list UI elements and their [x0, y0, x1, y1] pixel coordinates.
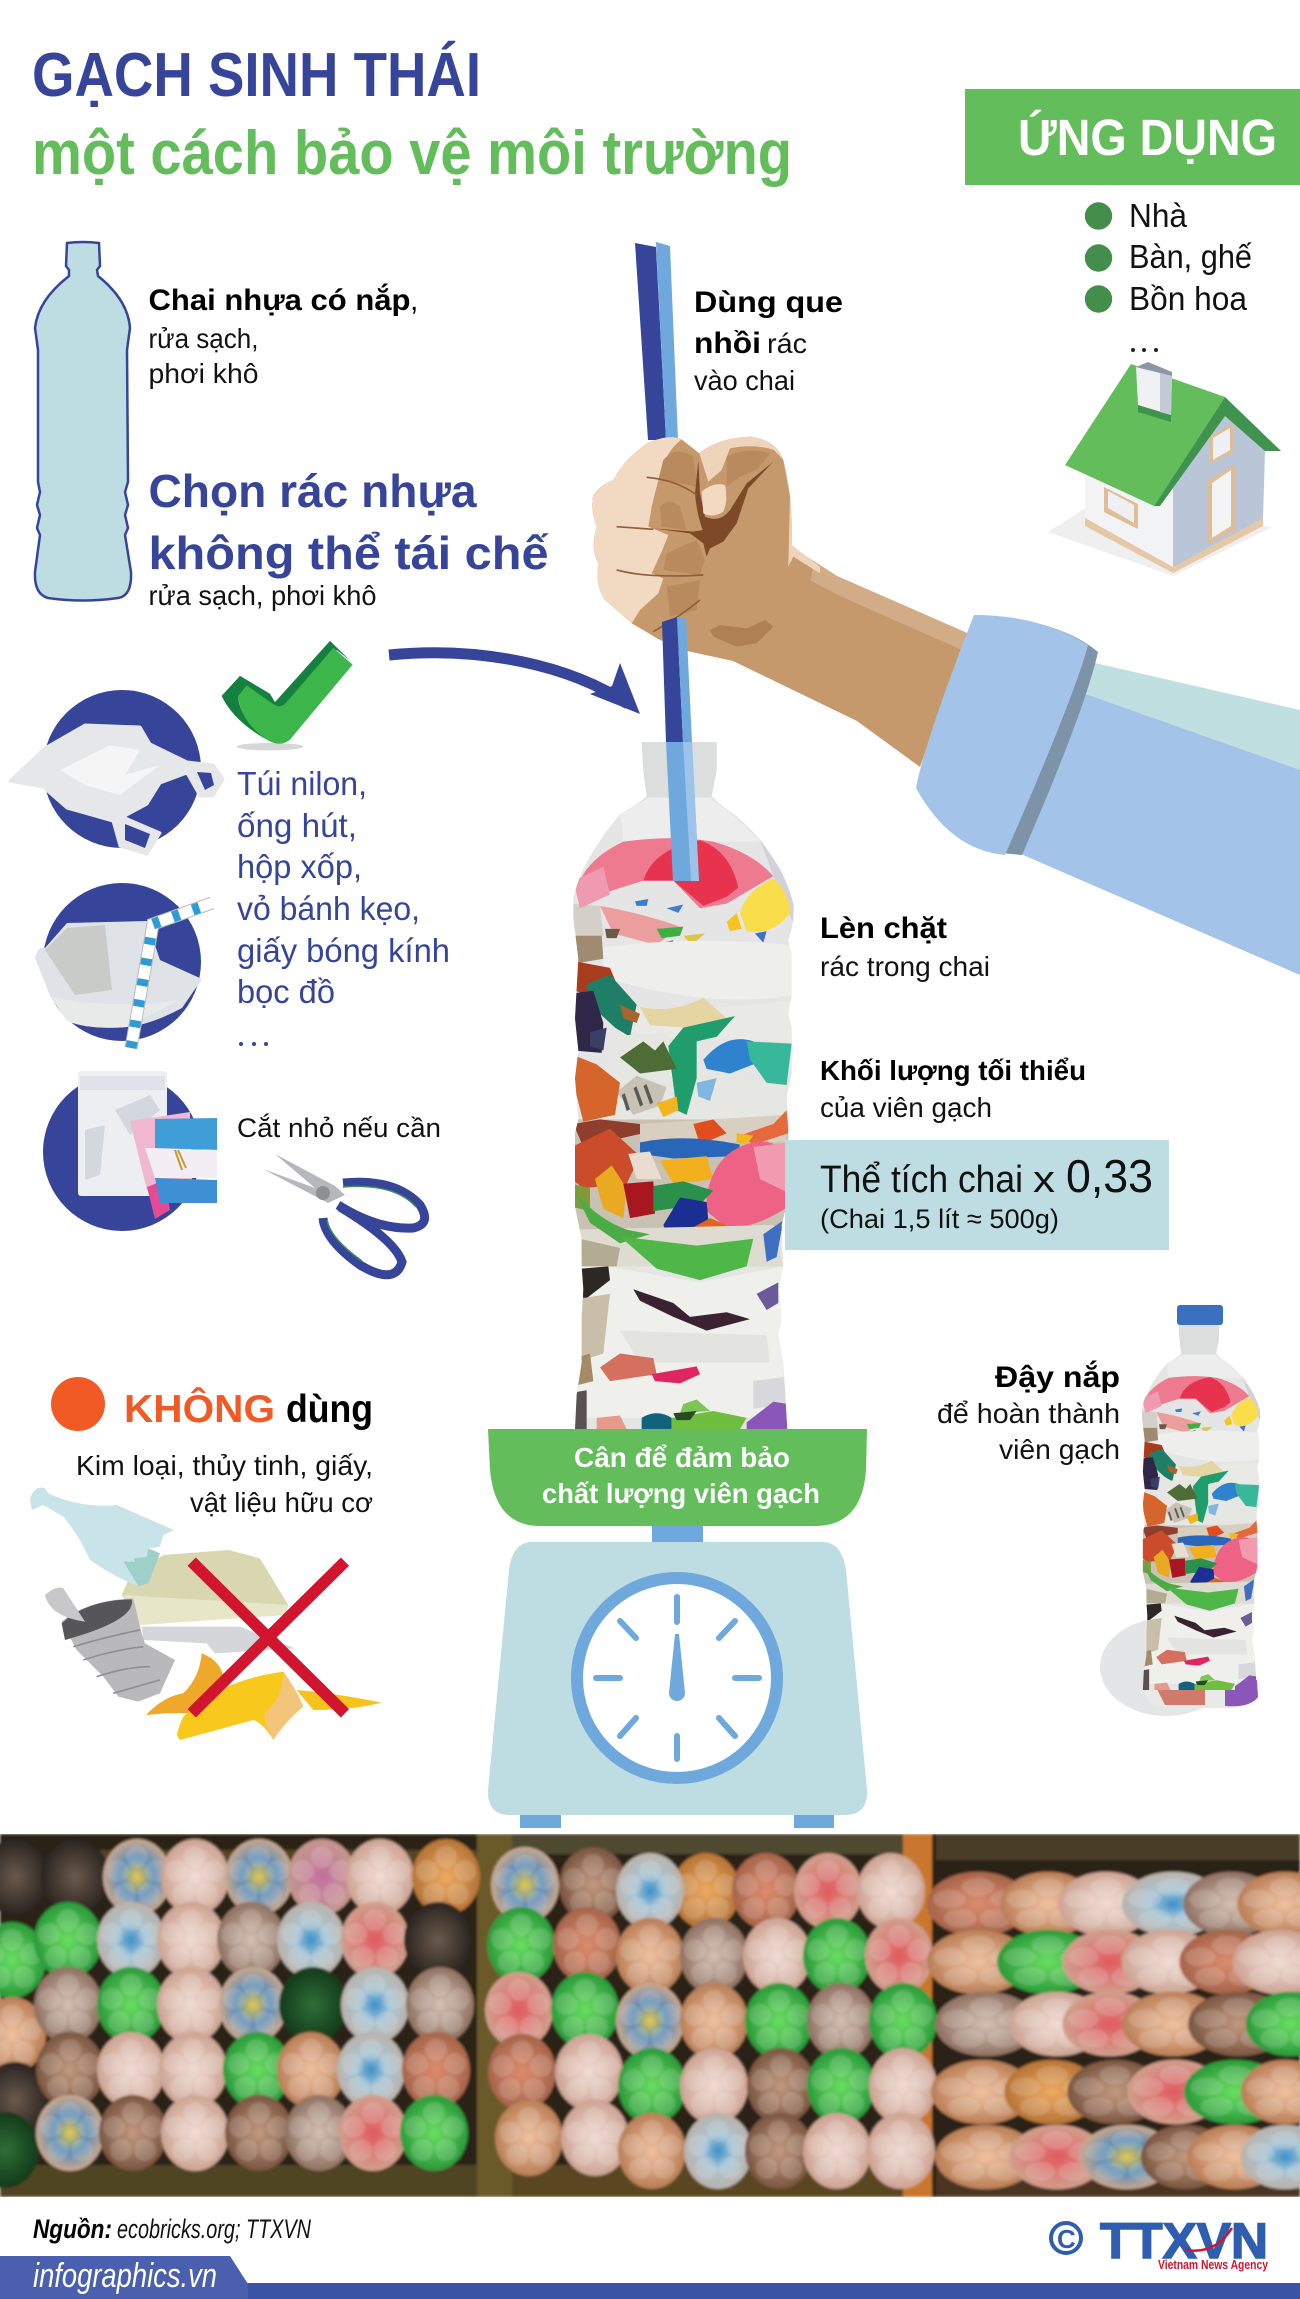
callout: weight formula: Thể tích chai	[820, 1159, 1023, 1201]
heading: do not use: dùng	[286, 1388, 373, 1431]
text: close cap: Đậy nắp	[995, 1360, 1120, 1394]
main filled bottle	[570, 742, 797, 1429]
heading: do not use: KHÔNG	[124, 1386, 275, 1431]
icon: orange dot	[51, 1377, 105, 1431]
text: bottle instruction: ,	[410, 284, 418, 317]
text: minimum weight	[820, 1055, 1086, 1123]
stick inside bottle	[666, 742, 699, 881]
lower stick	[662, 617, 692, 742]
applications list	[1085, 197, 1252, 352]
text: use stick: nhồi	[694, 327, 761, 360]
icon: plastic bag on blue circle	[10, 690, 223, 854]
icon: empty plastic bottle	[35, 242, 131, 600]
fist	[592, 437, 820, 660]
title: GẠCH SINH THÁI	[32, 41, 481, 110]
dial	[577, 1578, 777, 1778]
text: use stick: vào chai	[694, 365, 795, 396]
text: pack tightly: Lèn chặt	[820, 912, 947, 945]
text: recyclable plastic list: vỏ bánh kẹo,	[237, 890, 420, 927]
text: bottle instruction	[148, 283, 418, 389]
applications list: Nhà	[1129, 197, 1188, 234]
text: source: Nguồn:	[33, 2214, 112, 2244]
text: pack tightly: rác trong chai	[820, 951, 990, 982]
text: bottle instruction: phơi khô	[148, 358, 258, 389]
sleeve	[687, 548, 1300, 975]
callout: weight formula: 0,33	[1066, 1150, 1153, 1202]
title	[32, 41, 792, 188]
logo: TTXVN: TTXVN	[1100, 2213, 1268, 2269]
heading: choose non-recyclable plastic: rửa sạch, phơi khô	[148, 580, 376, 611]
text: close cap: để hoàn thành	[937, 1398, 1120, 1429]
callout: weight formula: (Chai 1,5 lít ≈ 500g)	[820, 1204, 1059, 1234]
text: forbidden materials: Kim loại, thủy tinh, giấy,	[76, 1450, 373, 1481]
text: minimum weight: Khối lượng tối thiểu	[820, 1055, 1086, 1086]
heading: choose non-recyclable plastic: Chọn rác nhựa	[148, 465, 477, 517]
heading: choose non-recyclable plastic	[148, 465, 549, 611]
weighing tray label: Cân để đảm bảo	[574, 1442, 790, 1473]
text: recyclable plastic list: hộp xốp,	[237, 848, 362, 885]
title: một cách bảo vệ môi trường	[32, 119, 792, 188]
icon: hand holding stuffing stick	[592, 242, 1300, 975]
text: minimum weight: của viên gạch	[820, 1092, 992, 1123]
icon: weighing scale	[488, 1429, 867, 1828]
scale body	[488, 1542, 867, 1815]
applications heading band: ỨNG DỤNG	[1018, 109, 1277, 166]
footer bar	[0, 2256, 1300, 2299]
text: recyclable plastic list: bọc đồ	[237, 973, 335, 1010]
applications list: Bồn hoa	[1129, 280, 1248, 317]
icon: green check mark	[222, 641, 353, 750]
text: recyclable plastic list: Túi nilon,	[237, 765, 367, 802]
text: bottle instruction: Chai nhựa có nắp	[148, 283, 410, 317]
applications heading band	[965, 89, 1300, 185]
logo: TTXVN: Vietnam News Agency	[1158, 2257, 1269, 2272]
callout: weight formula	[785, 1140, 1169, 1250]
text: use stick: rác	[767, 328, 807, 359]
weighing tray label	[488, 1429, 867, 1526]
upper stick	[635, 242, 678, 440]
heading: do not use	[124, 1386, 373, 1431]
panel: applications	[965, 89, 1300, 576]
panel: do not use	[30, 1377, 382, 1740]
scale stem	[652, 1526, 703, 1544]
text: source: ecobricks.org; TTXVN	[117, 2214, 311, 2244]
text: bottle instruction: rửa sạch,	[148, 323, 258, 354]
text: recyclable plastic list: ống hút,	[237, 807, 357, 844]
text: use stick: Dùng que	[694, 286, 843, 319]
heading: choose non-recyclable plastic: không thể tái chế	[148, 527, 549, 579]
icon: house	[1048, 362, 1281, 576]
text: recyclable plastic list	[237, 765, 450, 1046]
text: close cap	[937, 1360, 1120, 1465]
icon: scissors	[263, 1154, 425, 1275]
icon: crossed out waste	[30, 1488, 382, 1740]
photo: wall of ecobricks	[0, 1834, 1300, 2197]
icon: finished capped bottle	[1100, 1305, 1262, 1716]
callout: weight formula: x	[1033, 1159, 1055, 1201]
text: pack tightly	[820, 912, 990, 982]
text: forbidden materials	[76, 1450, 373, 1518]
weighing tray label: chất lượng viên gạch	[542, 1478, 820, 1509]
arrow	[389, 653, 640, 714]
text: forbidden materials: vật liệu hữu cơ	[190, 1487, 373, 1518]
scale feet	[520, 1812, 834, 1828]
applications list: Bàn, ghế	[1129, 238, 1252, 275]
icon: foam box and straw on blue circle	[35, 883, 212, 1048]
icon: pouch and wrappers on blue circle	[43, 1071, 217, 1231]
text: cut if needed: Cắt nhỏ nếu cần	[237, 1112, 441, 1143]
text: source	[33, 2214, 311, 2244]
text: use stick	[694, 286, 843, 396]
text: recyclable plastic list: giấy bóng kính	[237, 932, 450, 969]
logo: TTXVN: C	[1057, 2224, 1076, 2254]
text: close cap: viên gạch	[999, 1434, 1120, 1465]
footer bar: infographics.vn	[33, 2257, 217, 2295]
